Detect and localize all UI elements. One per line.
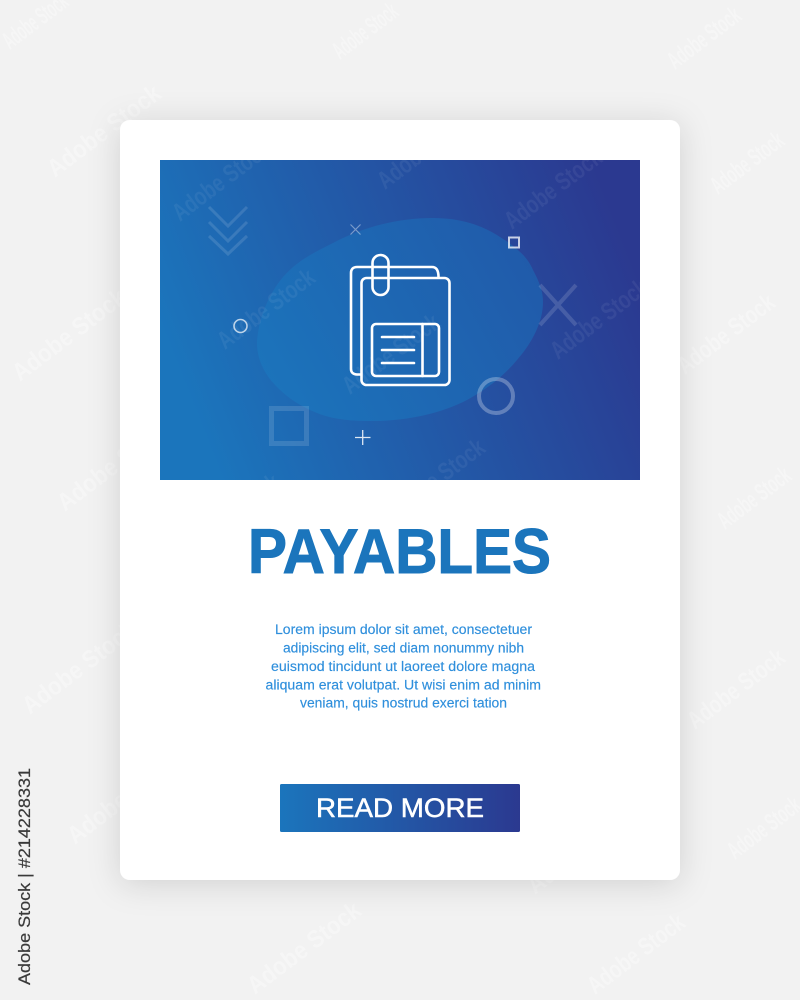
background watermarks: Adobe Stock — [522, 796, 646, 900]
panel: hero banner — [160, 160, 640, 480]
icon: chevrons — [209, 207, 247, 254]
icon: small cross — [350, 224, 360, 234]
banner watermarks: Adobe Stock — [545, 273, 654, 365]
blob — [257, 218, 543, 421]
body text: aliquam erat volutpat. Ut wisi enim ad minim — [266, 678, 541, 692]
banner watermarks — [174, 160, 640, 480]
banner watermarks: Adobe Stock — [382, 433, 491, 525]
stock id label: Adobe Stock | #214228331 — [15, 768, 34, 985]
icon: small square — [509, 238, 519, 248]
body text: euismod tincidunt ut laoreet dolore magna — [271, 659, 536, 674]
background watermarks: Adobe Stock — [582, 908, 691, 1000]
icon: large cross — [540, 285, 576, 325]
banner watermarks: Adobe Stock — [337, 308, 446, 400]
background watermarks: Adobe Stock — [62, 746, 186, 850]
banner watermarks: Adobe Stock — [372, 103, 481, 195]
icon: large square — [272, 408, 306, 444]
button: read more — [280, 784, 520, 832]
title: PAYABLES — [248, 517, 551, 587]
icon: large circle — [479, 379, 513, 413]
background watermarks: Adobe Stock — [242, 896, 366, 1000]
banner watermarks: Adobe Stock — [212, 263, 321, 355]
background watermarks: Adobe Stock — [42, 79, 166, 183]
banner watermarks: Adobe Stock — [177, 468, 286, 560]
background watermarks: Adobe Stock — [52, 413, 176, 517]
panel: card — [120, 120, 680, 880]
icon: small circle — [234, 320, 247, 332]
background watermarks: Adobe Stock — [17, 616, 141, 720]
body text: veniam, quis nostrud exerci tation — [300, 696, 507, 710]
body text — [266, 622, 541, 710]
body text: Lorem ipsum dolor sit amet, consectetuer — [275, 622, 533, 637]
banner watermarks: Adobe Stock — [499, 143, 608, 235]
button: read more: READ MORE — [316, 793, 484, 823]
banner watermarks: Adobe Stock — [167, 135, 276, 227]
icon: plus — [355, 430, 370, 445]
background watermarks: Adobe Stock — [7, 283, 131, 387]
body text: adipiscing elit, sed diam nonummy nibh — [283, 640, 524, 656]
icon: payables document with paperclip — [351, 255, 450, 385]
